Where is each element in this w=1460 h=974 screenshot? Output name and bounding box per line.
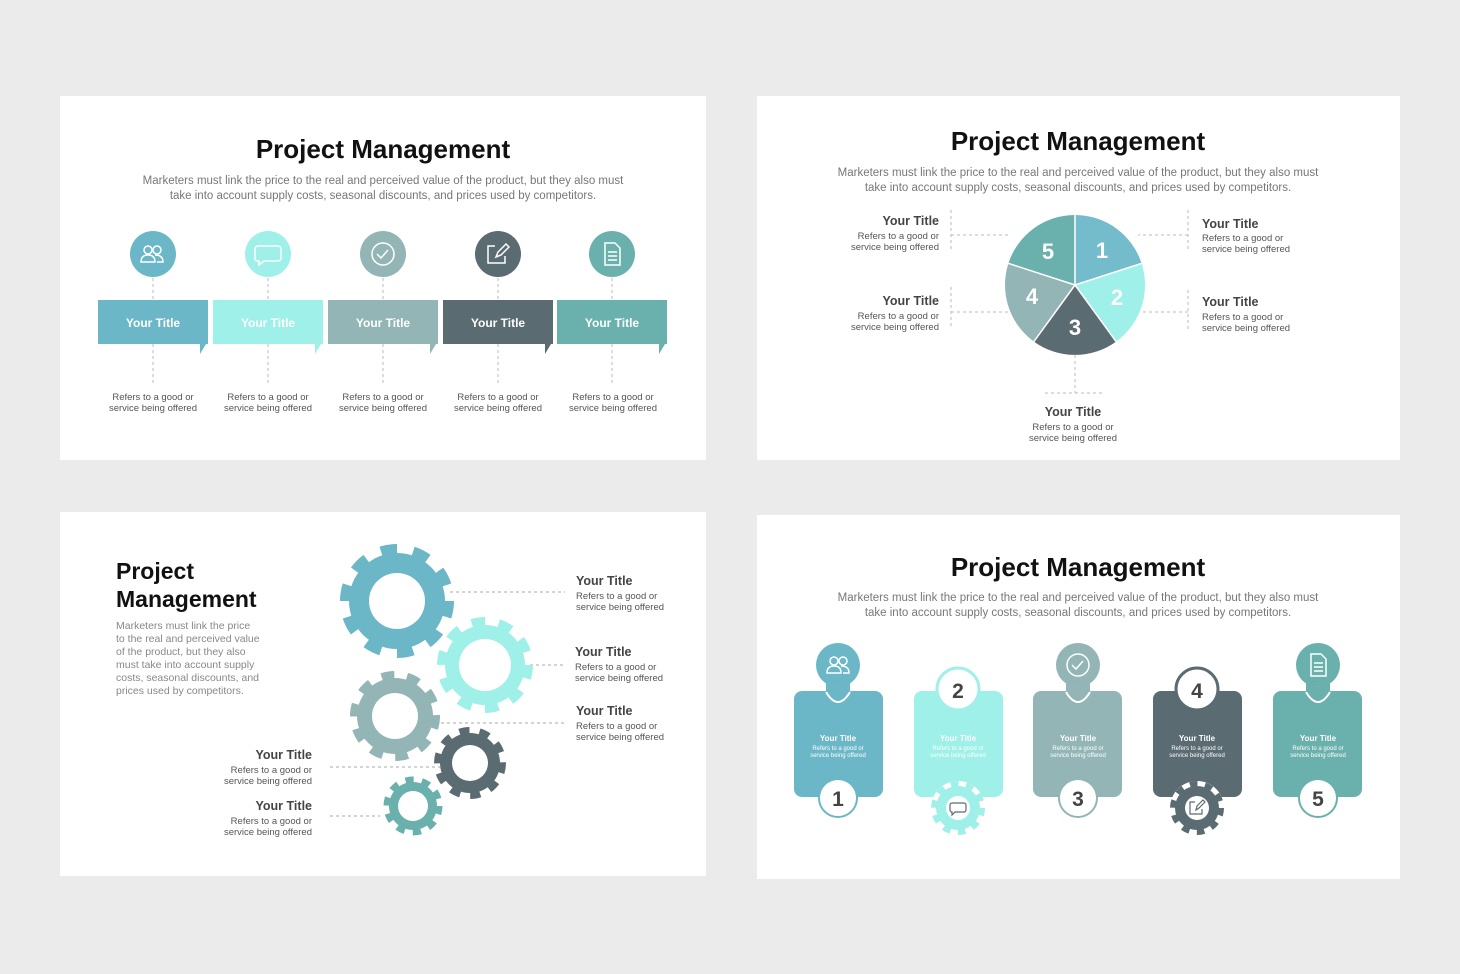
step 5: Your Title: [585, 316, 639, 330]
description: [116, 620, 260, 697]
step 4: [443, 231, 553, 414]
description: take into account supply costs, seasonal discounts, and prices used by competitors.: [170, 190, 596, 202]
label 1: [1202, 217, 1290, 255]
label 3: service being offered: [1029, 433, 1117, 444]
label 3: Refers to a good or: [1032, 422, 1114, 433]
description: take into account supply costs, seasonal discounts, and prices used by competitors.: [865, 607, 1291, 619]
card 3: Your Title: [1060, 734, 1097, 743]
card 4: [1153, 668, 1242, 835]
description: must take into account supply: [116, 659, 255, 671]
card 2: [914, 668, 1003, 835]
description: prices used by competitors.: [116, 685, 244, 697]
step 5: Refers to a good or: [572, 392, 654, 403]
label gear 5: Your Title: [256, 799, 312, 813]
label 4: Refers to a good or: [858, 311, 939, 322]
gear 5: [387, 780, 439, 832]
panel: bottom-right cards: [757, 515, 1400, 879]
card 4: service being offered: [1169, 753, 1225, 759]
description: Marketers must link the price to the real and perceived value of the product, but they also must: [838, 592, 1319, 604]
step 1: Refers to a good or: [112, 392, 194, 403]
label gear 4: service being offered: [224, 776, 312, 787]
panel: top-left timeline: [60, 96, 706, 460]
label 2: [1202, 295, 1290, 334]
pie chart: 4: [1026, 284, 1039, 309]
step 3: Refers to a good or: [342, 392, 424, 403]
label 2: Your Title: [1202, 295, 1259, 309]
title: Project Management: [951, 126, 1205, 156]
step 3: Your Title: [356, 316, 410, 330]
label 4: [851, 294, 939, 333]
pie chart: 1: [1096, 238, 1108, 263]
title: Management: [116, 586, 257, 612]
card 5: service being offered: [1290, 753, 1346, 759]
label gear 1: Your Title: [576, 574, 633, 588]
card 3: service being offered: [1050, 753, 1106, 759]
description: to the real and perceived value: [116, 633, 260, 645]
label gear 3: Refers to a good or: [576, 721, 657, 732]
card 4: 4: [1191, 680, 1203, 703]
step 1: Your Title: [126, 316, 180, 330]
pie chart: 3: [1069, 315, 1081, 340]
card 1: 1: [832, 788, 844, 811]
description: take into account supply costs, seasonal discounts, and prices used by competitors.: [865, 182, 1291, 194]
step 3: service being offered: [339, 403, 427, 414]
label 1: Your Title: [1202, 217, 1259, 231]
step 4: service being offered: [454, 403, 542, 414]
description: Marketers must link the price to the real and perceived value of the product, but they also must: [838, 167, 1319, 179]
label 4: service being offered: [851, 322, 939, 333]
label gear 4: Your Title: [256, 748, 312, 762]
label gear 2: Refers to a good or: [575, 662, 656, 673]
label gear 1: Refers to a good or: [576, 591, 657, 602]
step 5: [557, 231, 667, 414]
card 3: 3: [1072, 788, 1084, 811]
label gear 5: Refers to a good or: [231, 816, 312, 827]
description: of the product, but they also: [116, 646, 246, 658]
card 4: Refers to a good or: [1171, 746, 1223, 752]
label 3: Your Title: [1045, 405, 1101, 419]
label gear 5: service being offered: [224, 827, 312, 838]
description: [838, 167, 1319, 194]
gear 3: [355, 676, 435, 756]
gear 1: [346, 550, 448, 652]
label 2: Refers to a good or: [1202, 312, 1283, 323]
label gear 5: [224, 799, 312, 838]
label 3: [1029, 405, 1117, 444]
title: [116, 558, 257, 612]
card 5: Your Title: [1300, 734, 1337, 743]
description: Marketers must link the price: [116, 620, 250, 632]
label gear 2: Your Title: [575, 645, 632, 659]
card 3: [1033, 643, 1122, 817]
label gear 2: service being offered: [575, 673, 663, 684]
label 5: [851, 214, 939, 253]
title: Project Management: [951, 552, 1205, 582]
label gear 4: Refers to a good or: [231, 765, 312, 776]
label gear 1: [576, 574, 664, 613]
title: Project Management: [256, 134, 510, 164]
step 2: [213, 231, 323, 414]
card 2: service being offered: [930, 753, 986, 759]
label 1: service being offered: [1202, 244, 1290, 255]
description: Marketers must link the price to the real and perceived value of the product, but they also must: [143, 175, 624, 187]
card 1: Refers to a good or: [812, 746, 864, 752]
label 2: service being offered: [1202, 323, 1290, 334]
step 2: Your Title: [241, 316, 295, 330]
pie chart: 2: [1111, 285, 1123, 310]
card 2: Your Title: [940, 734, 977, 743]
label gear 3: [576, 704, 664, 743]
card 5: 5: [1312, 788, 1324, 811]
label 1: Refers to a good or: [1202, 233, 1283, 244]
step 1: service being offered: [109, 403, 197, 414]
panel: top-right pie: [757, 96, 1400, 460]
label gear 3: Your Title: [576, 704, 633, 718]
label 5: Your Title: [882, 214, 939, 228]
pie chart: [1005, 215, 1145, 355]
card 5: [1273, 643, 1362, 817]
title: Project: [116, 558, 194, 584]
card 5: Refers to a good or: [1292, 746, 1344, 752]
description: [143, 175, 624, 202]
step 1: [98, 231, 208, 414]
step 5: service being offered: [569, 403, 657, 414]
card 1: [794, 643, 883, 817]
label 5: Refers to a good or: [858, 231, 939, 242]
label gear 4: [224, 748, 312, 787]
step 2: service being offered: [224, 403, 312, 414]
card 4: Your Title: [1179, 734, 1216, 743]
label gear 1: service being offered: [576, 602, 664, 613]
label 4: Your Title: [882, 294, 939, 308]
step 2: Refers to a good or: [227, 392, 309, 403]
step 3: [328, 231, 438, 414]
card 1: service being offered: [810, 753, 866, 759]
label 5: service being offered: [851, 242, 939, 253]
pie chart: 5: [1042, 239, 1054, 264]
card 3: Refers to a good or: [1052, 746, 1104, 752]
label gear 2: [575, 645, 663, 684]
step 4: Refers to a good or: [457, 392, 539, 403]
gear 2: [442, 622, 528, 708]
card 2: 2: [952, 680, 964, 703]
label gear 3: service being offered: [576, 732, 664, 743]
step 4: Your Title: [471, 316, 525, 330]
description: [838, 592, 1319, 619]
card 1: Your Title: [820, 734, 857, 743]
panel: bottom-left gears: [60, 512, 706, 876]
description: costs, seasonal discounts, and: [116, 672, 259, 684]
gear 4: [438, 731, 502, 795]
card 2: Refers to a good or: [932, 746, 984, 752]
